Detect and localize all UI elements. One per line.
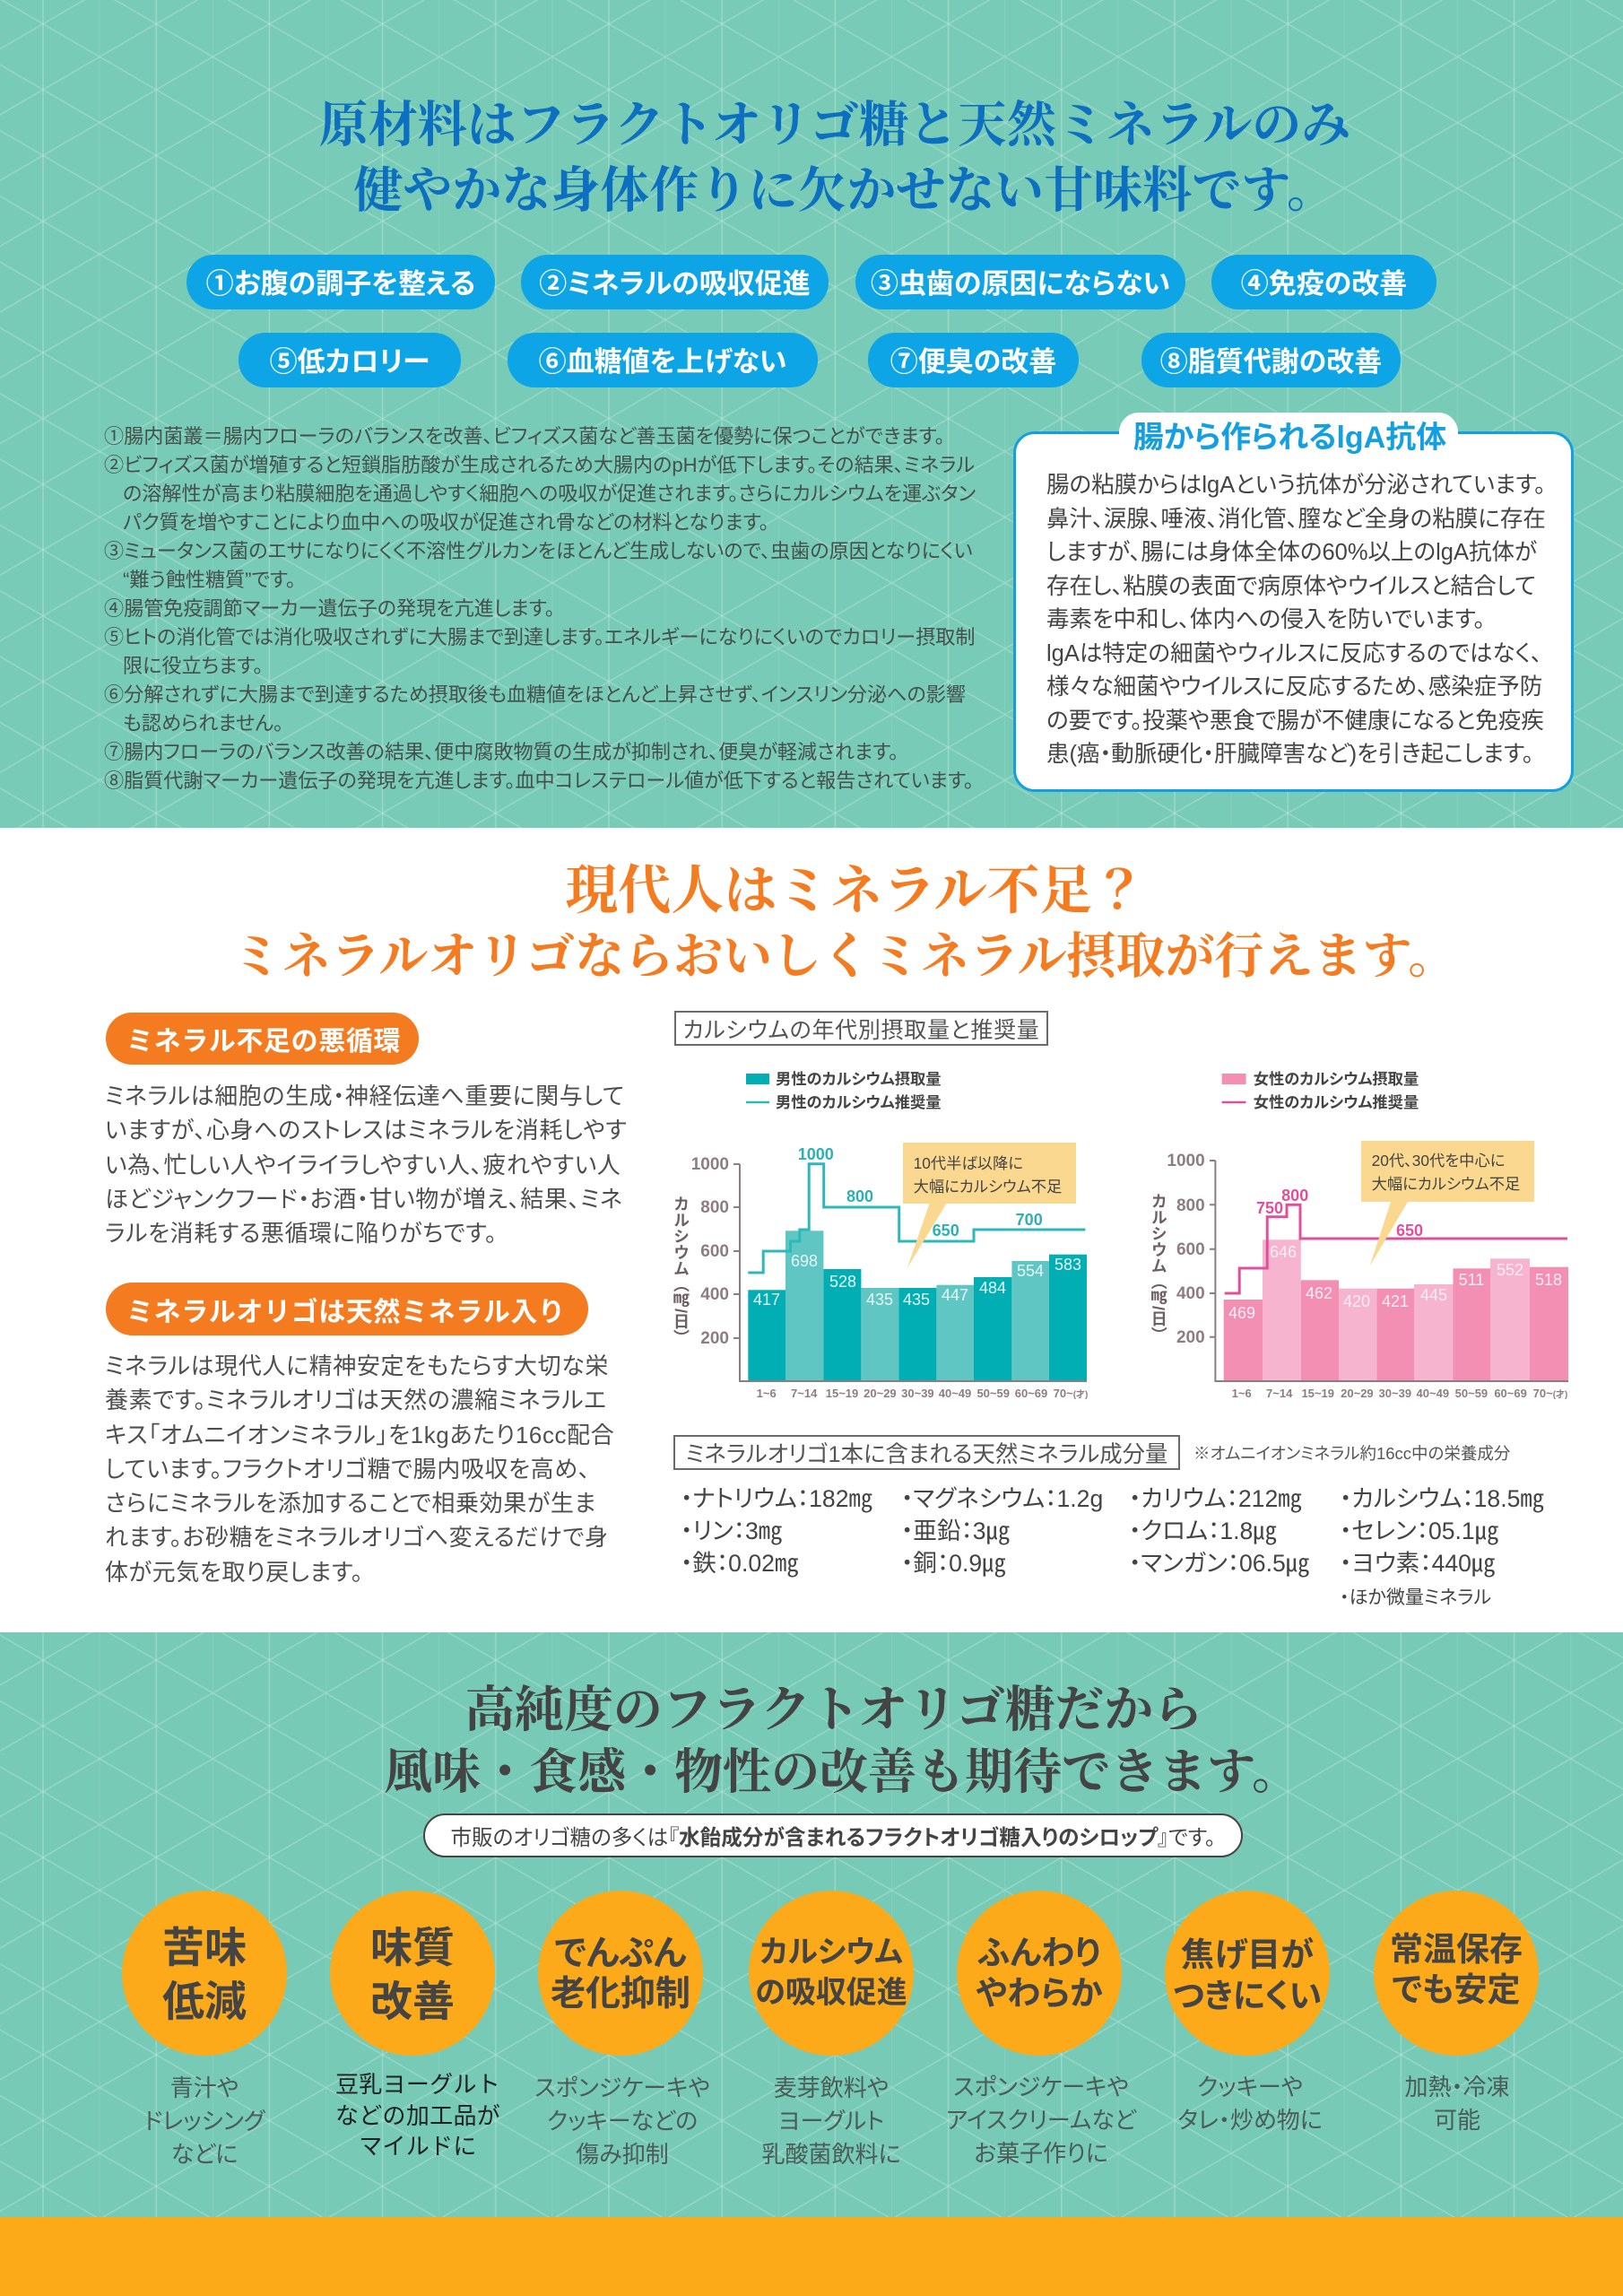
mineral list: ・ナトリウム：182㎎ <box>681 1485 872 1512</box>
legend: 男性のカルシウム摂取量 <box>776 1070 942 1088</box>
callout: teen shortage: 10代半ば以降に <box>914 1154 1023 1172</box>
benefit pill 3 <box>855 255 1185 309</box>
callout pill: syrup note: 水飴成分が含まれるフラクトオリゴ糖入りのシロップ <box>679 1826 1158 1849</box>
recommended labels <box>798 1145 1043 1239</box>
benefit pill 7 <box>868 333 1079 387</box>
footer bar <box>0 2217 1623 2296</box>
x axis labels: 15~19 <box>826 1387 858 1400</box>
caption: storage: 可能 <box>1434 2107 1480 2134</box>
x axis labels: 30~39 <box>901 1387 934 1400</box>
text block: numbered benefit notes: の溶解性が高まり粘膜細胞を通過しやすく細胞への吸収が促進されます。さらにカルシウムを運ぶタン <box>123 483 976 505</box>
x axis labels <box>757 1387 1088 1400</box>
bar values: 435 <box>903 1291 930 1309</box>
caption: storage: 加熱・冷凍 <box>1404 2074 1510 2100</box>
text block: natural minerals: れます。お砂糖をミネラルオリゴへ変えるだけで身 <box>105 1524 609 1551</box>
mineral list: ・銅：0.9㎍ <box>901 1550 1006 1577</box>
caption: softness: アイスクリームなど <box>946 2107 1136 2134</box>
heading: calcium intake: カルシウムの年代別摂取量と推奨量 <box>683 1017 1039 1042</box>
circle: softness: ふんわり <box>977 1935 1101 1971</box>
bar values: 445 <box>1420 1286 1447 1304</box>
y axis labels: 800 <box>700 1198 729 1217</box>
heading pill: vicious cycle <box>106 1013 419 1065</box>
x axis labels: 20~29 <box>1341 1387 1374 1400</box>
legend: 女性のカルシウム摂取量 <box>1254 1070 1419 1088</box>
text block: numbered benefit notes: “難う蝕性糖質”です。 <box>123 569 296 591</box>
x axis labels: 60~69 <box>1015 1387 1047 1400</box>
callout: 20s and 30s shortage: 大幅にカルシウム不足 <box>1372 1175 1520 1193</box>
circle: starch: 老化抑制 <box>551 1975 690 2013</box>
bar values: 511 <box>1459 1271 1484 1289</box>
legend <box>746 1070 942 1111</box>
callout body text: 様々な細菌やウイルスに反応するため、感染症予防 <box>1046 674 1542 700</box>
panel: ingredients and benefits <box>0 0 1623 828</box>
callout: 20s and 30s shortage <box>1361 1141 1534 1266</box>
x axis labels: 70~(才) <box>1533 1387 1567 1400</box>
bar values: 462 <box>1306 1284 1332 1302</box>
text block: numbered benefit notes: ④腸管免疫調節マーカー遺伝子の発現を亢進します。 <box>104 597 555 620</box>
caption: bitterness: 青汁や <box>170 2074 239 2101</box>
title: ingredients headline: 健やかな身体作りに欠かせない甘味料です。 <box>353 163 1336 218</box>
caption: softness <box>946 2074 1137 2167</box>
callout body text <box>1046 473 1546 767</box>
circle: bitterness <box>122 1891 287 2056</box>
bar values: 552 <box>1497 1261 1523 1279</box>
heading: calcium intake <box>674 1011 1048 1046</box>
bars <box>748 1231 1087 1381</box>
callout heading: 腸から作られるlgA抗体 <box>1133 421 1446 455</box>
panel: mineral deficiency <box>0 828 1623 1632</box>
bars <box>1224 1239 1568 1381</box>
mineral list: ・ほか微量ミネラル <box>1340 1587 1491 1608</box>
bar values <box>753 1252 1081 1309</box>
recommended labels: 700 <box>1016 1211 1043 1229</box>
callout body text: 鼻汁、涙腺、唾液、消化管、膣など全身の粘膜に存在 <box>1046 506 1546 531</box>
y axis labels: 600 <box>1176 1240 1205 1259</box>
caption: bitterness: ドレッシング <box>144 2108 265 2135</box>
title: high purity headline <box>384 1683 1300 1799</box>
benefit pill 8: ⑧脂質代謝の改善 <box>1160 346 1382 377</box>
title: high purity headline: 高純度のフラクトオリゴ糖だから <box>465 1683 1202 1737</box>
benefit pill 6 <box>508 333 818 387</box>
caption: taste <box>335 2071 500 2160</box>
y axis labels: 200 <box>1176 1328 1205 1347</box>
text block: numbered benefit notes: ⑦腸内フローラのバランス改善の結果、便中腐敗物質の生成が抑制され、便臭が軽減されます。 <box>104 741 898 763</box>
chart: male calcium intake <box>672 1070 1088 1400</box>
text block: numbered benefit notes: ⑤ヒトの消化管では消化吸収されずに大腸まで到達します。エネルギーになりにくいのでカロリー摂取制 <box>104 626 976 648</box>
x axis labels <box>1232 1387 1567 1400</box>
bar values <box>1228 1243 1562 1322</box>
chart: female calcium intake <box>1150 1070 1568 1400</box>
benefit pill 2: ②ミネラルの吸収促進 <box>539 267 811 300</box>
bar values: 554 <box>1017 1262 1044 1280</box>
text block: vicious cycle: いますが、心身へのストレスはミネラルを消耗しやす <box>105 1117 627 1144</box>
text block: numbered benefit notes: ②ビフィズス菌が増殖すると短鎖脂肪酸が生成されるため大腸内のpHが低下します。その結果、ミネラル <box>104 454 975 476</box>
bar values: 447 <box>942 1286 968 1304</box>
recommended labels: 650 <box>933 1222 959 1239</box>
mineral list: ・マグネシウム：1.2g <box>901 1485 1103 1512</box>
x axis labels: 7~14 <box>1266 1387 1293 1400</box>
caption: bitterness: などに <box>171 2141 238 2168</box>
y axis labels: 800 <box>1176 1196 1205 1215</box>
recommended labels <box>1256 1187 1423 1239</box>
circle: softness: やわらか <box>976 1975 1103 2012</box>
circle: starch: でんぷん <box>554 1935 687 1973</box>
mineral list: ・カルシウム：18.5㎎ <box>1340 1485 1544 1512</box>
axes <box>1210 1161 1568 1381</box>
axes <box>733 1164 1087 1381</box>
circle: browning: 焦げ目が <box>1181 1936 1314 1973</box>
bar values: 484 <box>979 1279 1006 1297</box>
callout: 20s and 30s shortage: 20代、30代を中心に <box>1372 1152 1505 1170</box>
title: mineral headline: ミネラルオリゴならおいしくミネラル摂取が行えます。 <box>232 929 1457 984</box>
title: high purity headline: 風味・食感・物性の改善も期待できます。 <box>384 1745 1300 1799</box>
title: ingredients headline <box>319 98 1350 218</box>
circle: bitterness: 苦味 <box>162 1923 247 1971</box>
recommended labels: 750 <box>1256 1199 1283 1217</box>
x axis labels: 60~69 <box>1494 1387 1527 1400</box>
title: ingredients headline: 原材料はフラクトオリゴ糖と天然ミネラルのみ <box>319 98 1350 152</box>
caption: starch: クッキーなどの <box>547 2108 698 2135</box>
text block: natural minerals: キス「オムニイオンミネラル」を1kgあたり16cc配合 <box>105 1422 614 1448</box>
x axis labels: 1~6 <box>1232 1387 1252 1400</box>
callout body text: の要です。投薬や悪食で腸が不健康になると免疫疾 <box>1046 709 1544 734</box>
x axis labels: 40~49 <box>939 1387 971 1400</box>
benefit pill 8 <box>1141 333 1401 387</box>
recommended labels: 800 <box>846 1187 873 1205</box>
callout: IgA antibody <box>1013 413 1574 792</box>
circle: browning: つきにくい <box>1173 1978 1322 2014</box>
text block: numbered benefit notes: 限に役立ちます。 <box>123 655 263 677</box>
heading: mineral content <box>673 1435 1180 1470</box>
caption: calcium absorption: ヨーグルト <box>778 2108 884 2135</box>
y axis labels <box>691 1155 729 1348</box>
bar values: 646 <box>1270 1243 1297 1261</box>
text block: numbered benefit notes: ①腸内菌叢＝腸内フローラのバランスを改善、ビフィズス菌など善玉菌を優勢に保つことができます。 <box>104 425 945 448</box>
caption: starch: 傷み抑制 <box>576 2141 669 2168</box>
mineral list <box>681 1485 1544 1608</box>
circle: softness <box>957 1891 1122 2056</box>
text block: natural minerals: 体が元気を取り戻します。 <box>105 1559 363 1586</box>
circle: calcium absorption: の吸収促進 <box>755 1976 907 2010</box>
callout body text: 患(癌・動脈硬化・肝臓障害など)を引き起こします。 <box>1046 742 1533 767</box>
circle: taste: 改善 <box>370 1977 455 2025</box>
callout body text: lgAは特定の細菌やウィルスに反応するのではなく、 <box>1046 640 1542 665</box>
legend <box>1222 1070 1419 1111</box>
circle: calcium absorption: カルシウム <box>759 1935 903 1970</box>
text block: natural minerals: 養素です。ミネラルオリゴは天然の濃縮ミネラルエ <box>105 1387 607 1413</box>
text block: vicious cycle: ラルを消耗する悪循環に陥りがちです。 <box>105 1220 497 1247</box>
callout body text: 腸の粘膜からはlgAという抗体が分泌されています。 <box>1046 473 1546 498</box>
x axis labels: 70~(才) <box>1054 1387 1088 1400</box>
bar values: 421 <box>1382 1292 1409 1310</box>
title: mineral headline <box>232 861 1457 984</box>
legend: 男性のカルシウム推奨量 <box>776 1093 942 1111</box>
caption: calcium absorption <box>761 2074 901 2168</box>
mineral list: ・亜鉛：3㎍ <box>901 1518 1010 1544</box>
bar values: 518 <box>1535 1271 1562 1289</box>
circle: taste <box>330 1891 495 2056</box>
benefit pill 4 <box>1211 255 1436 309</box>
caption: bitterness <box>144 2074 265 2168</box>
text block: vicious cycle: ミネラルは細胞の生成・神経伝達へ重要に関与して <box>105 1083 625 1109</box>
caption: browning: タレ・炒め物に <box>1177 2107 1323 2134</box>
caption: starch <box>534 2074 710 2168</box>
bar values: 420 <box>1343 1292 1370 1310</box>
caption: softness: スポンジケーキや <box>953 2074 1129 2100</box>
text block: numbered benefit notes: ⑥分解されずに大腸まで到達するため摂取後も血糖値をほとんど上昇させず、インスリン分泌への影響 <box>104 683 966 706</box>
x axis labels: 7~14 <box>791 1387 818 1400</box>
caption: calcium absorption: 麦芽飲料や <box>774 2074 889 2101</box>
caption: browning: クッキーや <box>1197 2074 1303 2100</box>
y axis labels: 400 <box>1176 1284 1205 1303</box>
circle: storage: でも安定 <box>1392 1971 1521 2008</box>
text block: numbered benefit notes: ⑧脂質代謝マーカー遺伝子の発現を亢進します。血中コレステロール値が低下すると報告されています。 <box>104 770 974 792</box>
y axis labels: 200 <box>700 1329 729 1348</box>
legend: 女性のカルシウム推奨量 <box>1254 1093 1419 1111</box>
mineral list: ・カリウム：212㎎ <box>1129 1485 1302 1512</box>
x axis labels: 1~6 <box>757 1387 777 1400</box>
benefit pill 4: ④免疫の改善 <box>1241 267 1407 300</box>
text block: numbered benefit notes: パク質を増やすことにより血中への吸収が促進され骨などの材料となります。 <box>123 511 769 534</box>
mineral list: ・クロム：1.8㎍ <box>1129 1518 1277 1544</box>
x axis labels: 50~59 <box>1455 1387 1488 1400</box>
benefit pill 2 <box>521 255 829 309</box>
circle: starch <box>538 1891 703 2056</box>
circle: storage <box>1374 1891 1539 2056</box>
heading: mineral content: ミネラルオリゴ1本に含まれる天然ミネラル成分量 <box>686 1442 1167 1467</box>
benefit pill 1: ①お腹の調子を整える <box>206 267 475 300</box>
bar values: 435 <box>866 1291 893 1309</box>
y axis title: カルシウム（㎎/日） <box>1150 1193 1167 1343</box>
benefit pill 7: ⑦便臭の改善 <box>890 346 1056 377</box>
benefit pill 6: ⑥血糖値を上げない <box>539 346 786 377</box>
circle: storage: 常温保存 <box>1390 1931 1523 1968</box>
callout: teen shortage <box>903 1143 1076 1268</box>
circle: bitterness: 低減 <box>162 1977 247 2025</box>
caption: taste: などの加工品が <box>335 2102 500 2129</box>
heading pill: natural minerals <box>106 1283 588 1335</box>
recommended labels: 1000 <box>798 1145 834 1163</box>
caption: starch: スポンジケーキや <box>534 2074 710 2101</box>
callout body text: 毒素を中和し、体内への侵入を防いでいます。 <box>1046 607 1485 632</box>
caption: storage <box>1404 2074 1510 2134</box>
title: mineral headline: 現代人はミネラル不足？ <box>565 861 1146 920</box>
y axis labels: 1000 <box>691 1155 729 1174</box>
heading pill: natural minerals: ミネラルオリゴは天然ミネラル入り <box>126 1297 566 1327</box>
mineral list: ・鉄：0.02㎎ <box>681 1550 799 1577</box>
caption: taste: マイルドに <box>359 2133 477 2160</box>
benefit pill 5 <box>239 333 461 387</box>
y axis labels: 400 <box>700 1285 729 1304</box>
text block: natural minerals: しています。フラクトオリゴ糖で腸内吸収を高め、 <box>105 1456 590 1483</box>
benefit pill 5: ⑤低カロリー <box>270 346 430 377</box>
x axis labels: 15~19 <box>1301 1387 1334 1400</box>
bar values: 469 <box>1228 1304 1255 1322</box>
benefit pill 1 <box>187 255 495 309</box>
recommended line <box>1225 1205 1567 1293</box>
x axis labels: 40~49 <box>1417 1387 1449 1400</box>
circle: calcium absorption <box>749 1891 914 2056</box>
bar values: 417 <box>753 1291 780 1309</box>
recommended labels: 800 <box>1281 1187 1308 1205</box>
text block: natural minerals: さらにミネラルを添加することで相乗効果が生ま <box>105 1490 596 1517</box>
heading pill: vicious cycle: ミネラル不足の悪循環 <box>126 1027 401 1057</box>
x axis labels: 30~39 <box>1379 1387 1411 1400</box>
x axis labels: 20~29 <box>864 1387 897 1400</box>
text block: numbered benefit notes: ③ミュータンス菌のエサになりにくく不溶性グルカンをほとんど生成しないので、虫歯の原因となりにくい <box>104 540 973 562</box>
callout pill: syrup note <box>423 1813 1243 1857</box>
caption: taste: 豆乳ヨーグルト <box>335 2071 500 2098</box>
callout pill: syrup note: 市販のオリゴ糖の多くは『 』です。 <box>450 1826 1216 1849</box>
text block: numbered benefit notes: も認められません。 <box>123 712 283 735</box>
note: omni-ion nutrition: ※オムニイオンミネラル約16cc中の栄養成分 <box>1193 1444 1510 1463</box>
circle: taste: 味質 <box>370 1923 455 1971</box>
text block: vicious cycle: い為、忙しい人やイライラしやすい人、疲れやすい人 <box>105 1152 621 1178</box>
caption: softness: お菓子作りに <box>974 2140 1108 2167</box>
benefit pill 3: ③虫歯の原因にならない <box>871 267 1170 300</box>
y axis labels: 1000 <box>1167 1152 1205 1170</box>
mineral list: ・セレン：05.1㎍ <box>1340 1518 1498 1544</box>
caption: browning <box>1177 2074 1323 2134</box>
y axis title: カルシウム（㎎/日） <box>672 1196 690 1345</box>
panel: high purity fructooligosaccharide <box>0 1632 1623 2217</box>
text block: numbered benefit notes <box>104 425 976 792</box>
text block: natural minerals: ミネラルは現代人に精神安定をもたらす大切な栄 <box>105 1352 609 1379</box>
x axis labels: 50~59 <box>976 1387 1010 1400</box>
text block: vicious cycle: ほどジャンクフード・お酒・甘い物が増え、結果、ミネ <box>105 1186 623 1213</box>
text block: natural minerals <box>105 1352 614 1586</box>
callout body text: しますが、腸には身体全体の60%以上のlgA抗体が <box>1046 540 1537 565</box>
caption: calcium absorption: 乳酸菌飲料に <box>761 2141 901 2168</box>
y axis labels: 600 <box>700 1242 729 1261</box>
bar values: 583 <box>1055 1256 1081 1274</box>
bar values: 528 <box>829 1273 856 1291</box>
callout: teen shortage: 大幅にカルシウム不足 <box>914 1178 1062 1196</box>
mineral list: ・リン：3㎎ <box>681 1518 782 1544</box>
mineral list: ・ヨウ素：440㎍ <box>1340 1550 1496 1577</box>
text block: vicious cycle <box>105 1083 627 1247</box>
y axis labels <box>1167 1152 1205 1347</box>
circle: browning <box>1165 1891 1330 2056</box>
recommended labels: 650 <box>1396 1222 1423 1239</box>
callout body text: 存在し、粘膜の表面で病原体やウイルスと結合して <box>1046 574 1536 599</box>
bar values: 698 <box>791 1252 818 1270</box>
recommended line <box>748 1164 1085 1273</box>
mineral list: ・マンガン：06.5㎍ <box>1129 1550 1309 1577</box>
